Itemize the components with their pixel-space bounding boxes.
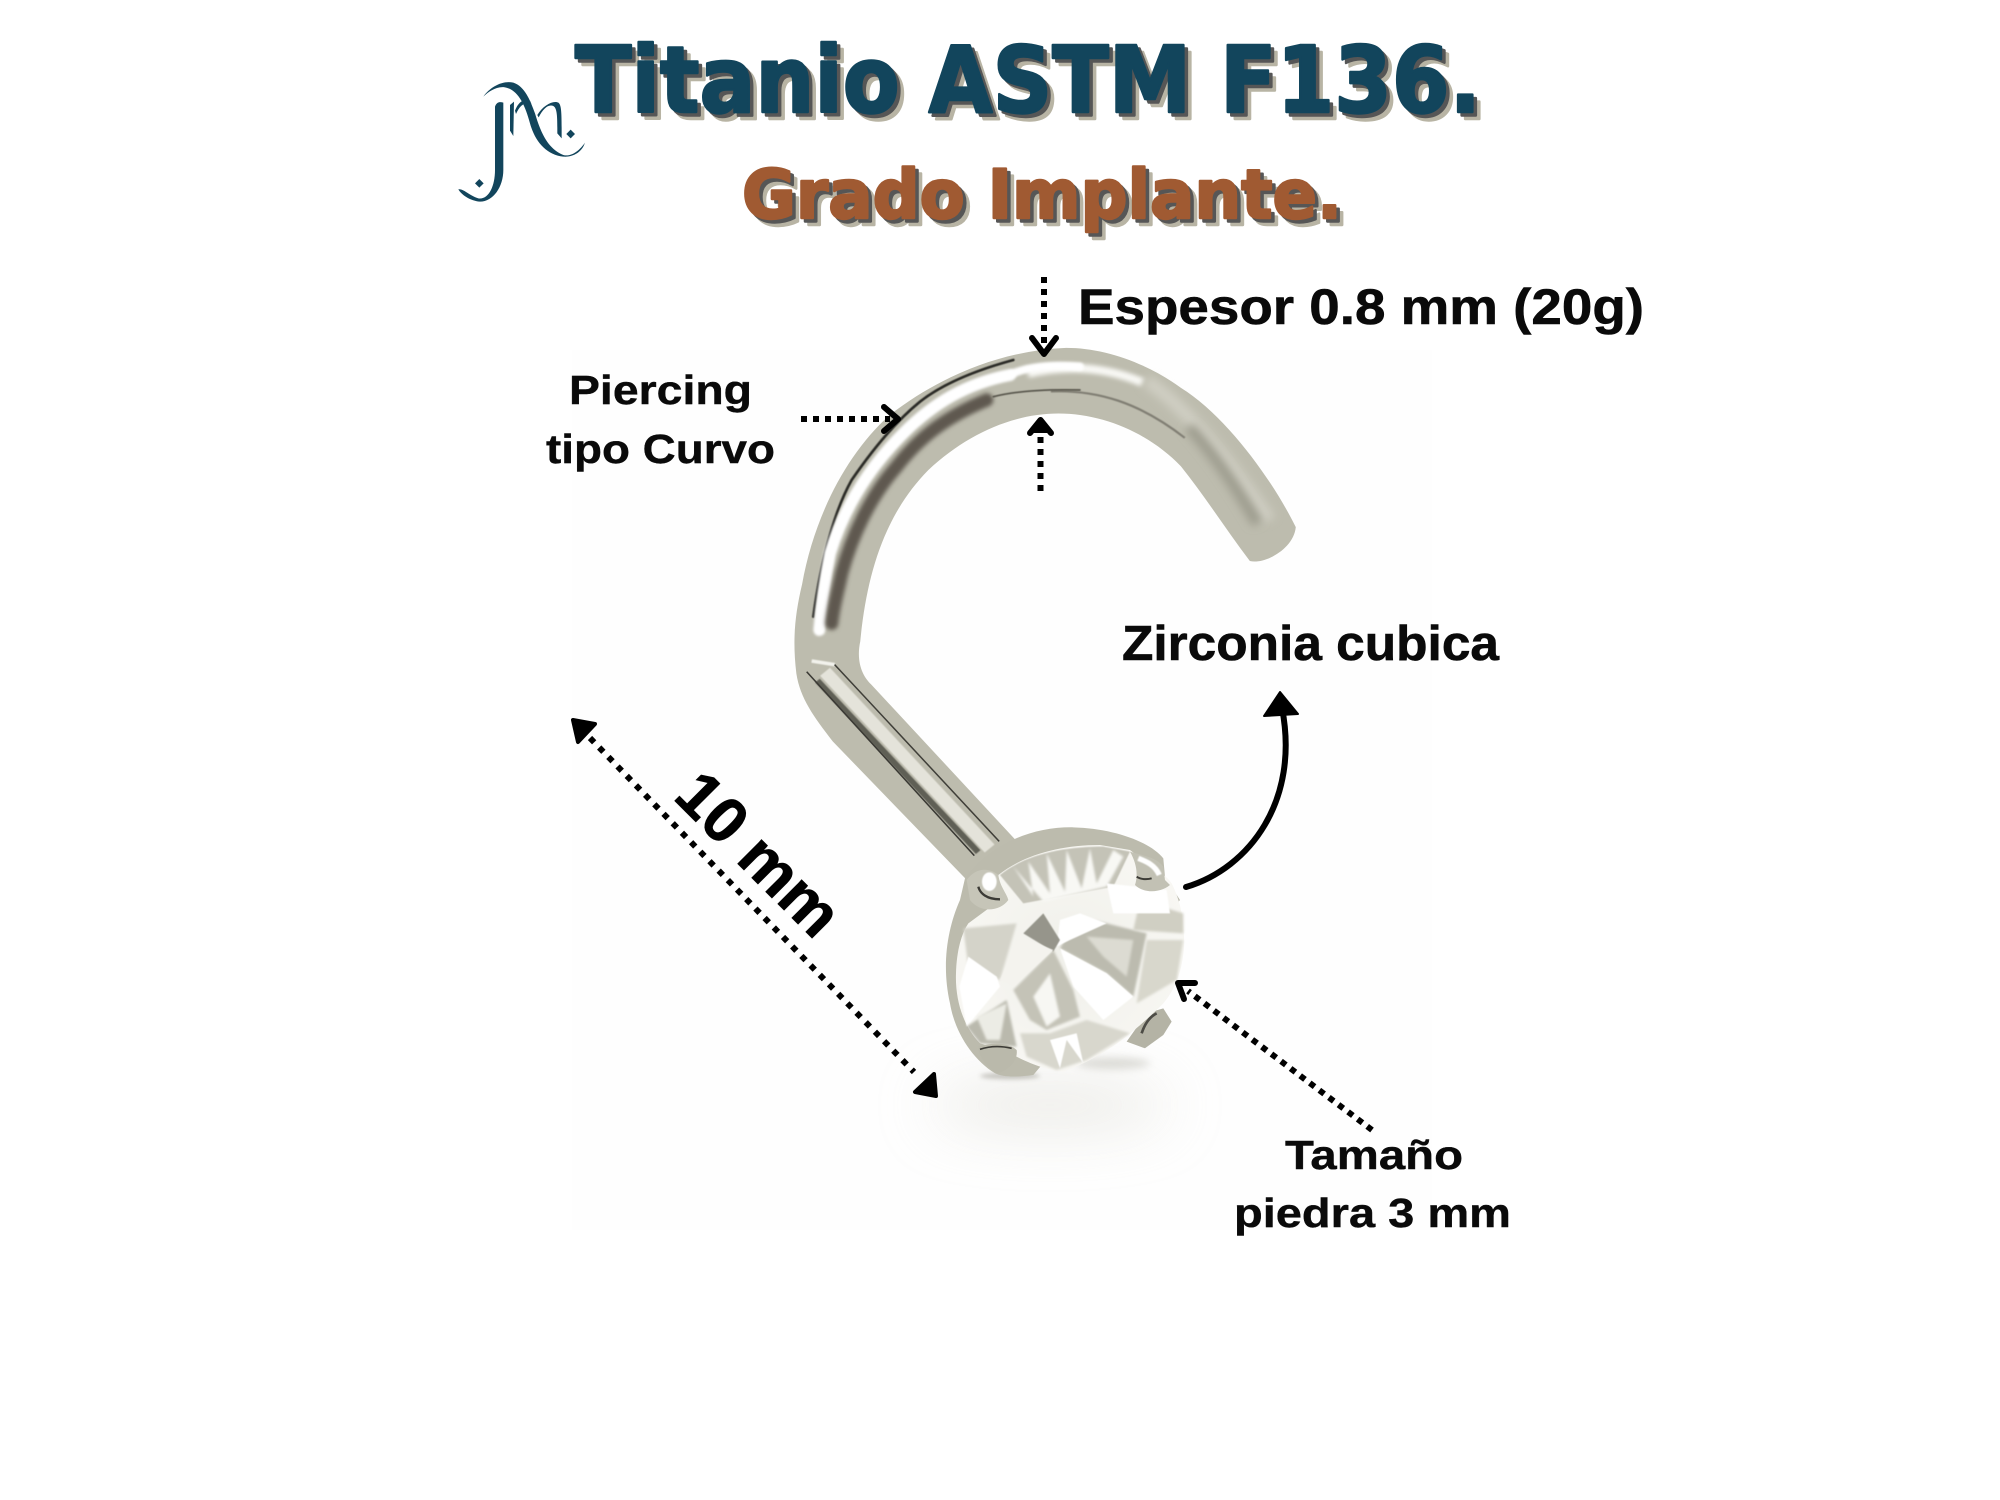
subtitle: Grado Implante.: Grado Implante. bbox=[746, 160, 1346, 238]
logo: JM monogram bbox=[458, 82, 585, 202]
label: Tamaño piedra 3 mm: piedra 3 mm bbox=[1234, 1190, 1511, 1236]
subtitle: Grado Implante.: Grado Implante. bbox=[749, 163, 1349, 242]
stone head: bezel, prongs and zirconia bbox=[946, 827, 1184, 1079]
arrow: stone size bbox=[1178, 983, 1372, 1130]
label: Piercing tipo Curvo: tipo Curvo bbox=[546, 426, 775, 472]
zirconia stone bbox=[956, 845, 1184, 1072]
nose stud: curved titanium wire bbox=[794, 348, 1296, 888]
arrow: wire thickness from below bbox=[1030, 420, 1051, 491]
arrow: wire thickness from above bbox=[1032, 277, 1056, 354]
top-left prong bbox=[967, 870, 1008, 909]
label: Piercing tipo Curvo: Piercing bbox=[569, 367, 752, 413]
label: Espesor 0.8 mm (20g): Espesor 0.8 mm (20g) bbox=[1078, 279, 1644, 335]
arrow: curved piercing type bbox=[801, 407, 898, 431]
arrow: curved to cubic zirconia bbox=[1186, 692, 1298, 887]
label: Tamaño piedra 3 mm: Tamaño bbox=[1285, 1132, 1463, 1178]
label: Tamaño piedra 3 mm bbox=[1234, 1132, 1511, 1236]
top-right prong bbox=[1130, 852, 1170, 891]
subtitle: Grado Implante.: Grado Implante. bbox=[742, 156, 1342, 235]
label: Piercing tipo Curvo bbox=[546, 367, 775, 472]
bottom-left prong bbox=[978, 1044, 1017, 1073]
title: Titanio ASTM F136.: Titanio ASTM F136. bbox=[578, 30, 1484, 138]
label: 10 mm: 10 mm bbox=[662, 757, 856, 951]
label: Zirconia cubica: Zirconia cubica bbox=[1122, 617, 1500, 671]
title: Titanio ASTM F136.: Titanio ASTM F136. bbox=[582, 34, 1488, 141]
arrow: 10 mm length bbox=[573, 720, 936, 1096]
title: Titanio ASTM F136.: Titanio ASTM F136. bbox=[575, 27, 1481, 134]
